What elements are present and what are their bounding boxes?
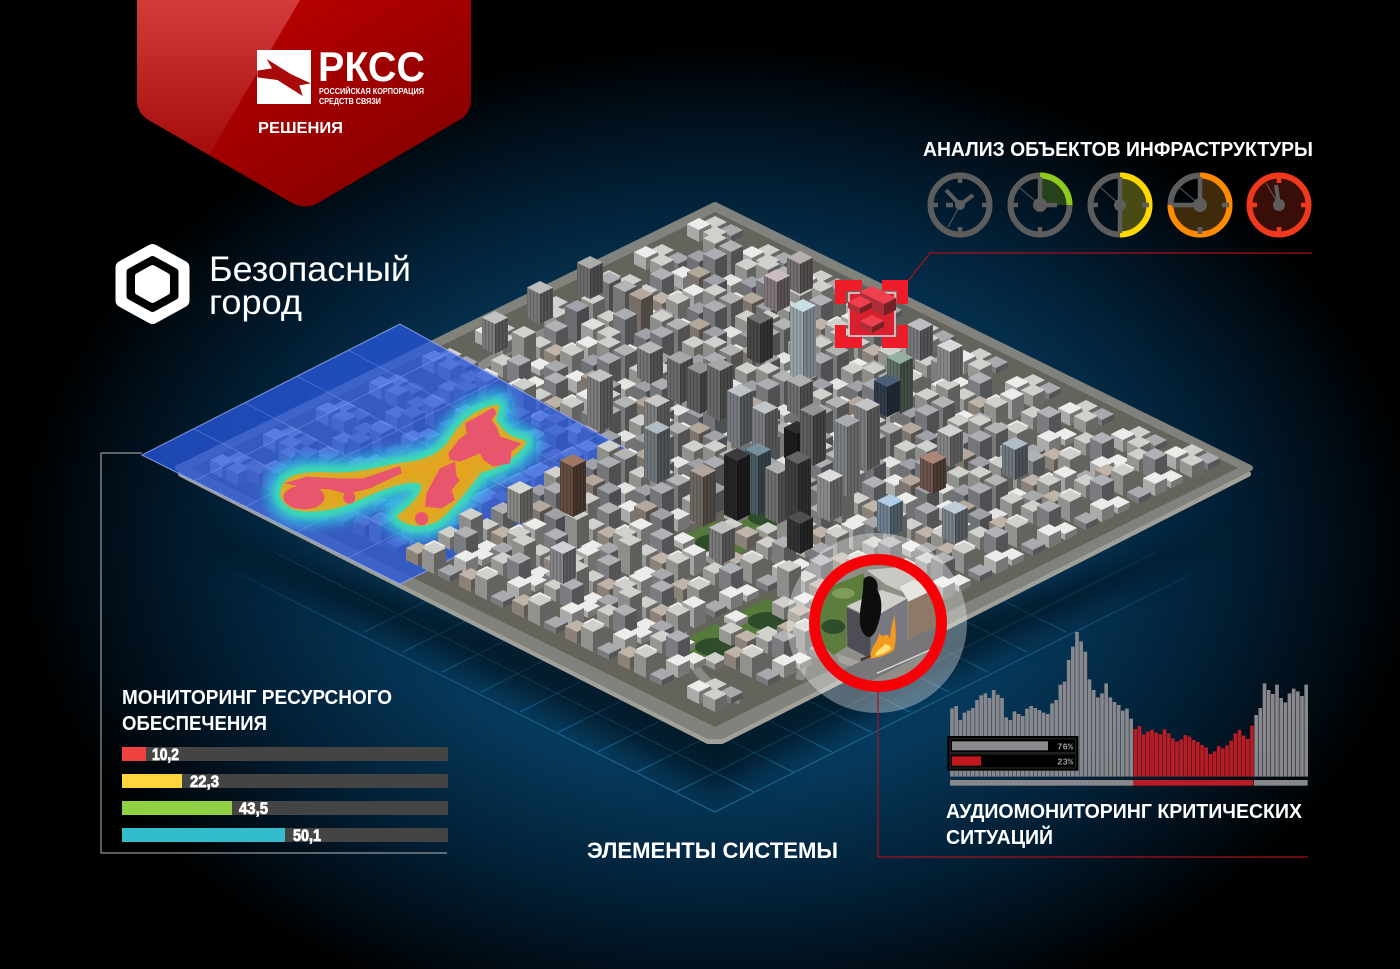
- target brackets: [840, 286, 902, 342]
- logo wordmark: РКСС: [318, 43, 425, 90]
- icon: clock half: [1090, 176, 1150, 234]
- panel: resource monitoring: [101, 453, 448, 853]
- audio legend: [947, 736, 1078, 771]
- heat blob: [283, 407, 523, 525]
- shield label: РЕШЕНИЯ: [258, 120, 343, 137]
- bar chart: 43,5: [239, 799, 268, 818]
- audio legend: 76%: [1057, 742, 1074, 752]
- city buildings in front of heat map: [406, 414, 1220, 712]
- heat map panel: [142, 324, 650, 584]
- red ring: [814, 560, 942, 686]
- logo subtitle: РОССИЙСКАЯ КОРПОРАЦИЯ: [319, 87, 424, 96]
- brand shield: [137, 0, 471, 206]
- city platform: [178, 205, 1250, 741]
- selected infrastructure object: [840, 253, 1312, 342]
- halo: [787, 533, 967, 713]
- shield gloss: [137, 0, 300, 155]
- icon: hexagon: [122, 251, 182, 317]
- heading: МОНИТОРИНГ РЕСУРСНОГО: [122, 687, 392, 709]
- audio bar chart: [950, 632, 1308, 786]
- icon: clock three quarters: [1170, 176, 1230, 234]
- red building: [849, 293, 895, 336]
- leader line: [878, 692, 1308, 857]
- ground grid: [235, 392, 1195, 812]
- panel: audio monitoring: [946, 632, 1308, 849]
- fire incident callout: [787, 533, 1308, 857]
- icon: clock critical: [1250, 176, 1308, 234]
- panel: resource monitoring: ОБЕСПЕЧЕНИЯ: [122, 713, 267, 735]
- leader bracket: [101, 453, 447, 853]
- ring roads: [430, 275, 830, 700]
- brand shield: СРЕДСТВ СВЯЗИ: [319, 97, 381, 106]
- city buildings behind heat map: [210, 216, 1167, 554]
- burning building scene: [820, 565, 936, 681]
- bar chart: 50,1: [293, 826, 321, 845]
- product title: [122, 250, 411, 322]
- shield shape: [137, 0, 471, 206]
- panel: infrastructure analysis: [923, 139, 1313, 234]
- bar chart: 22,3: [190, 772, 219, 791]
- logo mark: [257, 50, 311, 104]
- bar chart: [122, 745, 448, 845]
- heat map plane: [142, 324, 650, 584]
- icon: clock quarter: [1010, 176, 1070, 234]
- bar chart: 10,2: [152, 745, 179, 764]
- icon: clock neutral: [930, 176, 990, 234]
- panel: audio monitoring: СИТУАЦИЙ: [946, 825, 1053, 849]
- heading: АУДИОМОНИТОРИНГ КРИТИЧЕСКИХ: [946, 801, 1303, 823]
- heading: АНАЛИЗ ОБЪЕКТОВ ИНФРАСТРУКТУРЫ: [923, 139, 1313, 161]
- title text: Безопасный: [209, 250, 411, 289]
- product title: город: [209, 283, 302, 322]
- leader line: [908, 253, 1312, 281]
- audio legend: 23%: [1057, 758, 1074, 768]
- system elements caption: ЭЛЕМЕНТЫ СИСТЕМЫ: [587, 838, 838, 863]
- platform shadow: [190, 530, 1230, 790]
- downtown towers: [482, 251, 1028, 584]
